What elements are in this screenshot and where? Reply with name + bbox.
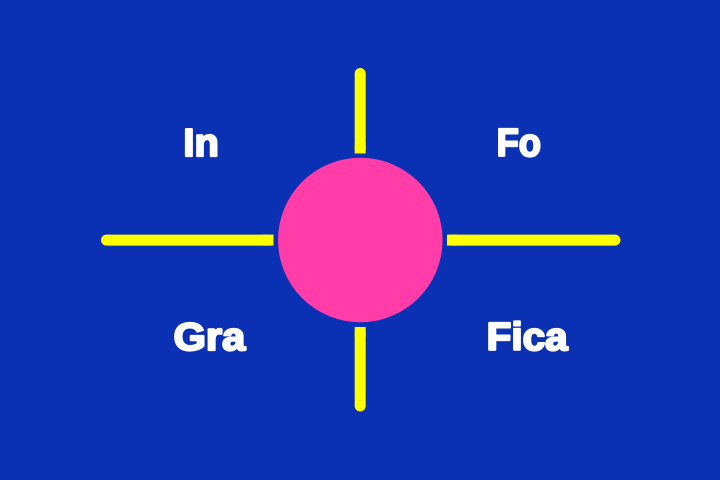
label: In: In	[183, 122, 219, 165]
line: top spoke	[355, 68, 366, 154]
line: bottom spoke	[355, 327, 366, 412]
line: left spoke	[101, 235, 274, 246]
label: Fica: Fica	[487, 316, 568, 359]
center circle	[278, 158, 443, 322]
label: Gra: Gra	[174, 316, 246, 359]
label: Fo: Fo	[497, 122, 541, 165]
line: right spoke	[447, 235, 620, 246]
